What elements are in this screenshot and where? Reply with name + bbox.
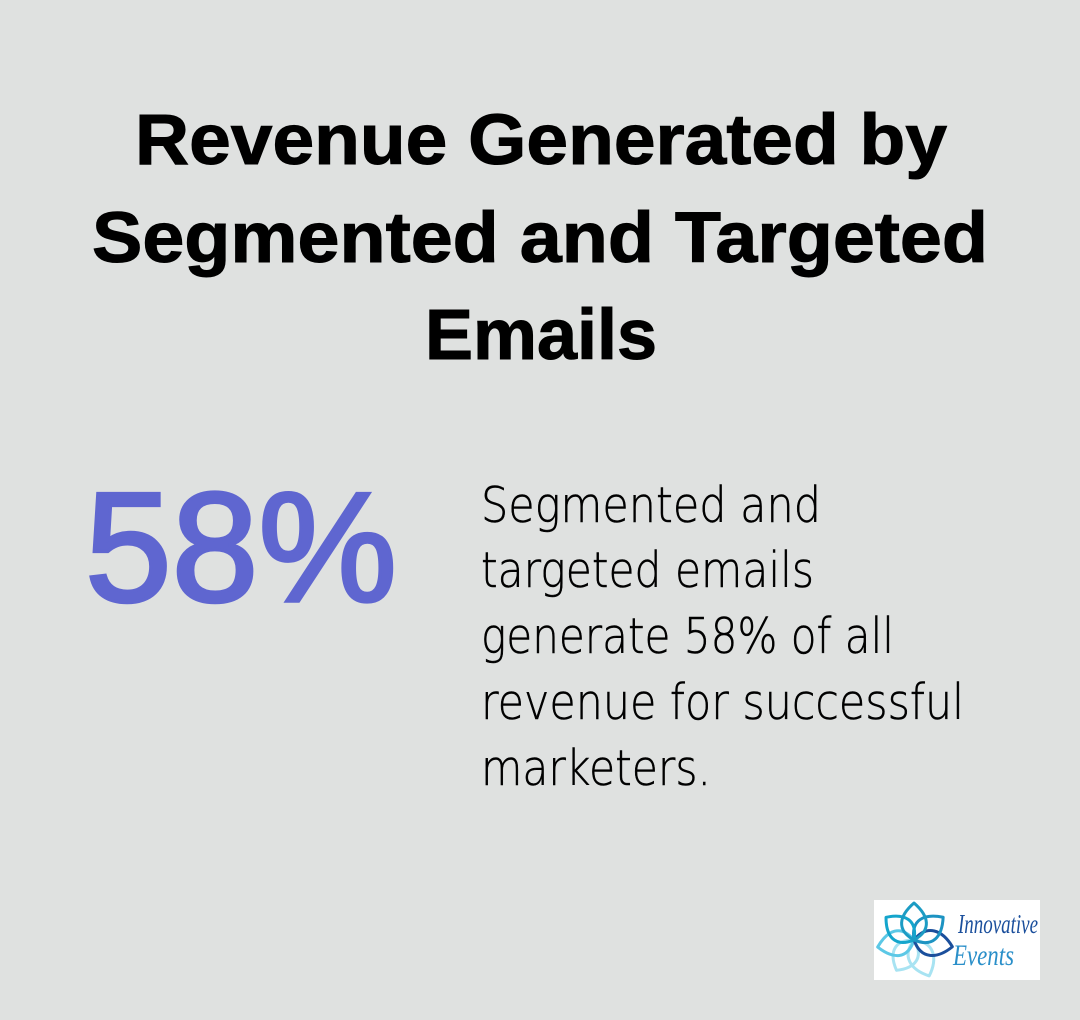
description text: [481, 477, 964, 797]
description text: targeted emails: [481, 542, 814, 599]
description text: Segmented and: [481, 477, 821, 534]
description text: revenue for successful: [481, 674, 964, 731]
logo wordmark: [952, 909, 1038, 972]
title: Revenue Generated by: [135, 101, 948, 180]
title: Emails: [425, 296, 657, 375]
big statistic: 58%: 58%: [85, 461, 397, 635]
logo: Innovative Events: [874, 900, 1040, 981]
logo wordmark: Innovative: [957, 909, 1038, 939]
logo wordmark: Events: [952, 939, 1014, 972]
title: [92, 101, 988, 375]
description text: marketers.: [481, 740, 711, 797]
description text: generate 58% of all: [481, 608, 894, 665]
icon: lotus flower: [875, 903, 955, 981]
title: Segmented and Targeted: [92, 199, 988, 278]
